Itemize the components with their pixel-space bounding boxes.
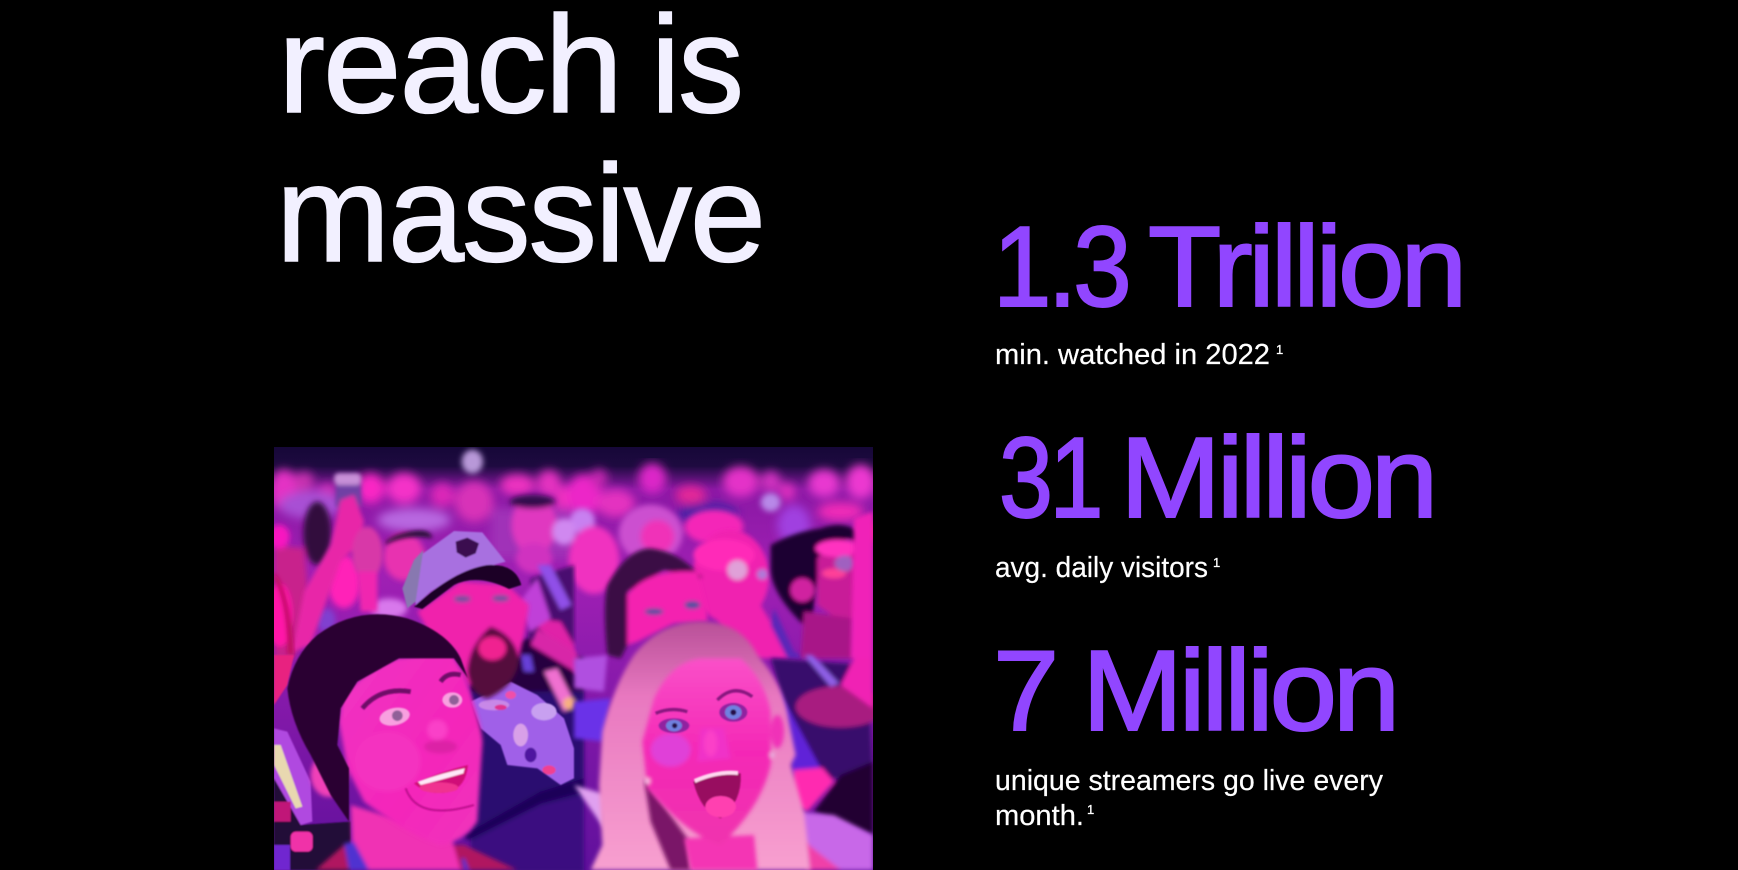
hair	[591, 622, 811, 870]
cap man	[402, 531, 529, 698]
shirt and neck	[316, 805, 517, 870]
midground: right man with dark hair	[771, 525, 867, 658]
front right woman	[574, 512, 886, 870]
raised phone and hands	[292, 473, 432, 652]
stat: 1.3 Trillion: 1.3	[993, 204, 1128, 331]
stat: 7 Million: Million	[1082, 628, 1396, 755]
stat: 31 Million: 31	[999, 415, 1100, 542]
midground: person with glasses	[692, 530, 807, 658]
stat: 1.3 Trillion: min. watched in 2022	[995, 339, 1270, 371]
lights and wristbands at lower left	[274, 655, 351, 870]
shoulder	[796, 812, 873, 870]
stat: 1.3 Trillion	[993, 204, 1463, 371]
photo: excited crowd in magenta light	[267, 447, 886, 870]
midground: lanyard man	[517, 565, 574, 658]
cap man shirt graphic	[471, 682, 574, 785]
midground: woman behind	[605, 548, 707, 658]
stat: 7 Million: month.	[995, 800, 1084, 832]
stat: 7 Million: unique streamers go live every	[995, 765, 1383, 797]
stat: 31 Million: Million	[1120, 415, 1434, 542]
crowd backdrop	[274, 447, 873, 870]
left edge figure	[274, 572, 296, 656]
title	[276, 0, 764, 291]
open mouth	[406, 765, 474, 811]
blurred background heads	[270, 463, 884, 558]
stat: 7 Million: 7	[993, 628, 1055, 755]
hair	[287, 614, 468, 822]
face	[417, 582, 529, 698]
purple shirt behind	[574, 512, 886, 835]
stat: 31 Million: 1	[1213, 555, 1220, 570]
stat: 31 Million	[995, 415, 1434, 584]
neck shadow	[644, 778, 691, 870]
stat: 7 Million: 1	[1087, 802, 1094, 817]
title: massive	[276, 137, 764, 291]
open mouth	[693, 773, 741, 818]
lit background figures	[268, 450, 781, 658]
eyes and brows	[656, 691, 752, 733]
face and neck	[642, 658, 784, 870]
eyes and brows	[362, 674, 462, 728]
face	[311, 652, 482, 845]
cap	[402, 531, 521, 609]
front left man	[287, 614, 517, 870]
stat: 31 Million: avg. daily visitors	[995, 552, 1208, 584]
cap man body	[464, 628, 584, 870]
stat: 7 Million	[993, 628, 1396, 832]
stat: 1.3 Trillion: Trillion	[1148, 204, 1463, 331]
stat: 1.3 Trillion: 1	[1276, 342, 1283, 357]
